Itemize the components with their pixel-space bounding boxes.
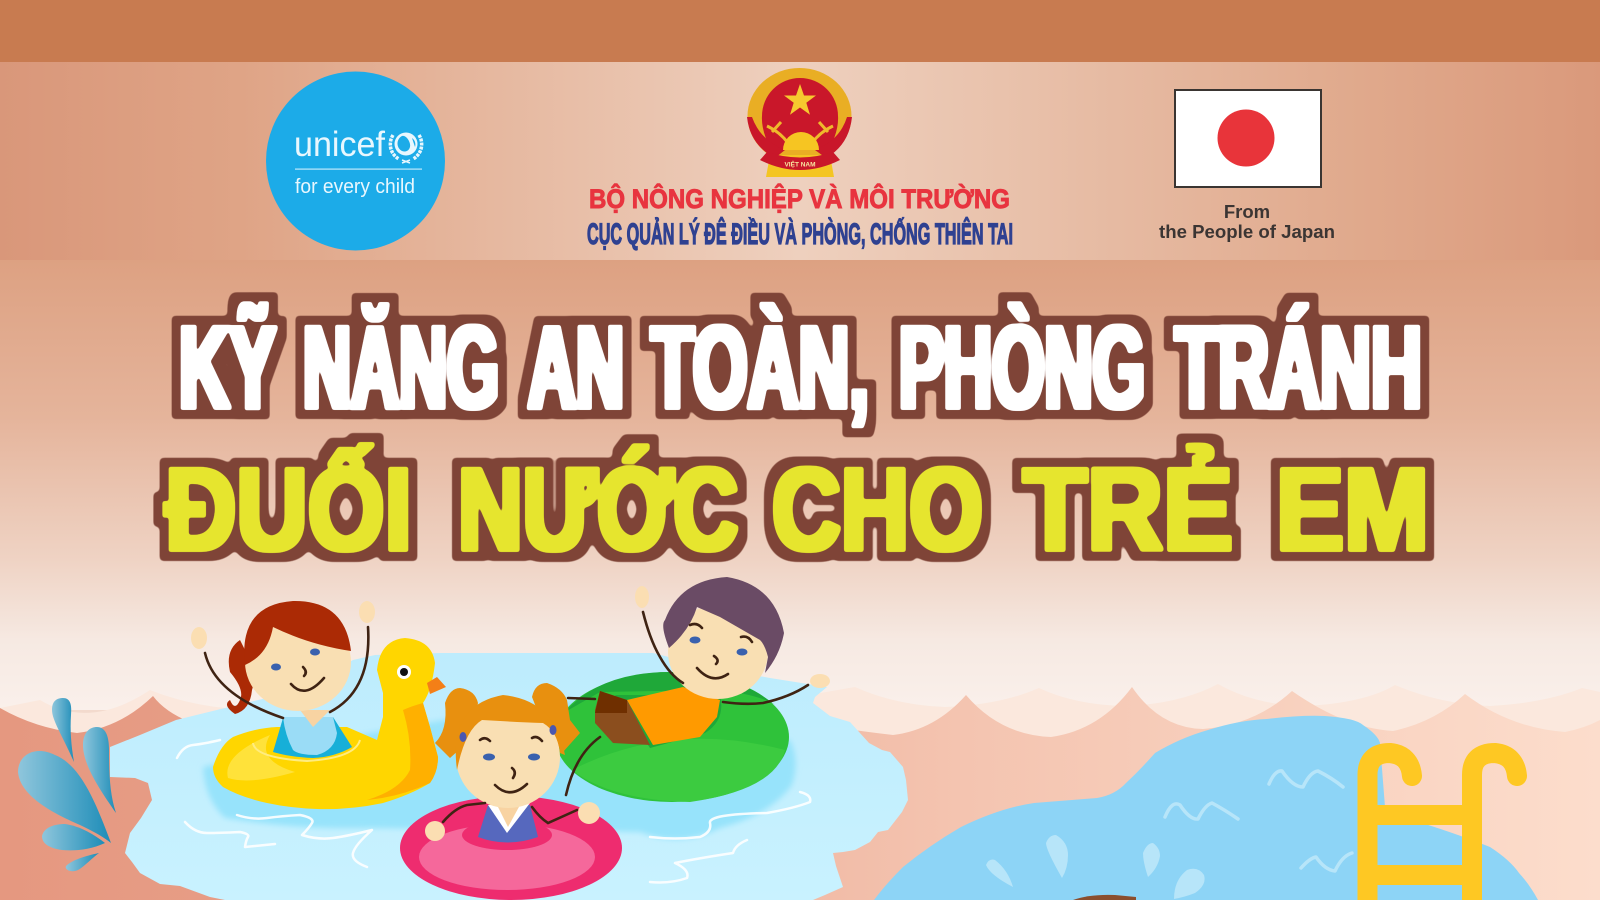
red hair xyxy=(244,601,351,665)
orange hair xyxy=(456,695,565,770)
top stripe xyxy=(0,0,1600,62)
wave: light back layer xyxy=(0,684,1600,900)
title line 1: TRÁNH xyxy=(1175,302,1422,434)
brown shorts xyxy=(595,691,650,745)
title line 1: PHÒNG xyxy=(899,302,1145,434)
caption: From the People of Japan: From xyxy=(1224,201,1270,222)
wave: main salmon layer xyxy=(0,687,1600,900)
green ring xyxy=(555,672,789,802)
title line 2: EM xyxy=(1276,444,1429,576)
face details xyxy=(480,737,542,792)
face xyxy=(668,605,768,699)
duck float xyxy=(213,638,446,809)
face xyxy=(245,613,351,711)
title line 2: TRẺ xyxy=(1023,443,1233,576)
icon: unicef globe emblem xyxy=(390,132,422,163)
orange shirt xyxy=(627,687,720,745)
face xyxy=(456,706,560,808)
logo: Japan flag xyxy=(1175,90,1321,187)
character: boy on green ring xyxy=(555,577,830,802)
department name: CỤC QUẢN LÝ ĐÊ ĐIỀU VÀ PHÒNG, CHỐNG THIÊN TAI xyxy=(587,217,1013,251)
character: girl on duck ring xyxy=(191,601,446,809)
title line 1: KỸ xyxy=(179,302,276,434)
ponytail xyxy=(227,640,255,714)
title line 1: NĂNG xyxy=(303,302,499,434)
pool: right pool xyxy=(874,716,1538,900)
splash drops xyxy=(18,698,116,871)
background xyxy=(0,260,1600,710)
blue shirt xyxy=(273,717,352,758)
title line 1: AN xyxy=(528,302,624,434)
water droplets xyxy=(986,835,1205,899)
logo: unicef xyxy=(266,72,445,250)
title line 2 xyxy=(165,443,1429,576)
pool: left water xyxy=(110,653,908,900)
face details xyxy=(271,648,324,691)
pool: deeper water under rings xyxy=(203,700,796,839)
logo: unicef: for every child xyxy=(295,176,415,198)
pigtails xyxy=(435,688,478,758)
caption: From the People of Japan xyxy=(1159,201,1335,242)
title line 1: TOÀN, xyxy=(651,302,869,434)
title line 2: ĐUỐI xyxy=(165,443,412,576)
icon: Vietnam national emblem: VIỆT NAM xyxy=(784,160,816,168)
face details xyxy=(690,624,752,678)
icon: Vietnam national emblem xyxy=(747,68,852,177)
blue shirt xyxy=(478,805,538,842)
arms and hands xyxy=(205,627,368,718)
header band xyxy=(0,62,1600,260)
title line 1 xyxy=(179,302,1422,434)
pink ring xyxy=(400,796,622,900)
water ripples xyxy=(177,740,810,882)
character: girl on pink ring xyxy=(400,683,622,900)
arms and hands xyxy=(443,803,577,823)
hair ties xyxy=(460,725,556,742)
logo: unicef: unicef xyxy=(294,125,385,164)
title line 2: CHO xyxy=(772,444,983,576)
water marks in right pool xyxy=(1165,771,1352,871)
caption: From the People of Japan: the People of Japan xyxy=(1159,221,1335,242)
pool ladder xyxy=(1368,753,1517,900)
arms, legs and hands xyxy=(566,612,808,795)
swimmer head xyxy=(1073,895,1136,900)
ministry name: BỘ NÔNG NGHIỆP VÀ MÔI TRƯỜNG xyxy=(589,183,1010,214)
title line 2: NƯỚC xyxy=(458,444,738,576)
purple hair xyxy=(663,577,784,673)
